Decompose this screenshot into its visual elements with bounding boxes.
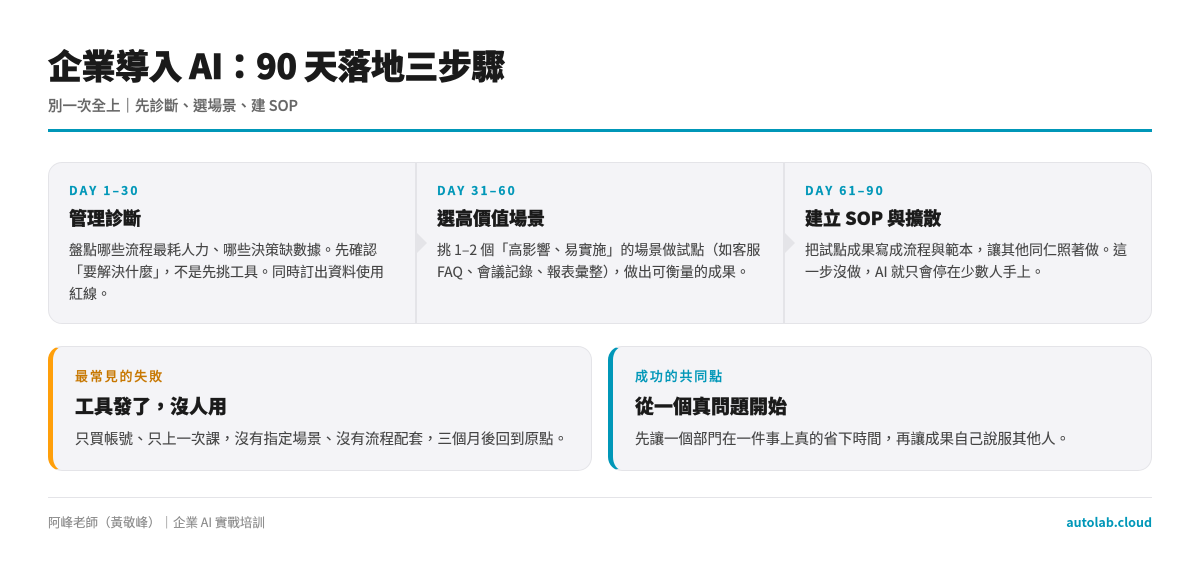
step 3 body: 一步沒做，AI 就只會停在少數人手上。 [805,262,1045,282]
title: 企業導入 AI：90 天落地三步驟 [48,40,505,89]
step 2 label: DAY 31–60 [437,182,517,199]
step 1 body [69,240,384,304]
step 1 body: 「要解決什麼」，不是先挑工具。同時訂出資料使用 [69,262,384,282]
step 3 heading: 建立 SOP 與擴散 [805,205,941,231]
divider and arrow 2 [783,163,794,323]
step 2 body [437,240,760,282]
step 1 label: DAY 1–30 [69,182,140,199]
failure body: 只買帳號、只上一次課，沒有指定場景、沒有流程配套，三個月後回到原點。 [75,428,568,449]
footer credit: 阿峰老師（黃敬峰）｜企業 AI 實戰培訓 [48,512,265,531]
header rule [48,129,1152,132]
success body: 先讓一個部門在一件事上真的省下時間，再讓成果自己說服其他人。 [635,428,1070,449]
step 2: day 31-60 [437,182,760,282]
step 2 body: FAQ、會議記錄、報表彙整），做出可衡量的成果。 [437,262,750,282]
step 2 heading: 選高價值場景 [437,205,545,231]
step 1 body: 紅線。 [69,284,111,304]
success heading: 從一個真問題開始 [635,392,787,419]
failure label: 最常見的失敗 [75,366,164,385]
failure heading: 工具發了，沒人用 [75,392,227,419]
step 1 heading: 管理診斷 [69,205,141,231]
step 2 body: 挑 1–2 個「高影響、易實施」的場景做試點（如客服 [437,240,760,260]
footer link: autolab.cloud [1066,512,1152,531]
success label: 成功的共同點 [635,366,724,385]
footer divider [48,497,1152,498]
step 1: day 1-30 [69,182,384,304]
callout: what successes share [608,346,1152,471]
step 1 body: 盤點哪些流程最耗人力、哪些決策缺數據。先確認 [69,240,377,260]
subtitle: 別一次全上｜先診斷、選場景、建 SOP [48,95,298,116]
panel: three steps [48,162,1152,324]
step 3 body [805,240,1127,282]
step 3: day 61-90 [805,182,1127,282]
callout: most common failure [48,346,592,471]
step 3 label: DAY 61–90 [805,182,885,199]
step 3 body: 把試點成果寫成流程與範本，讓其他同仁照著做。這 [805,240,1127,260]
divider and arrow 1 [415,163,426,323]
